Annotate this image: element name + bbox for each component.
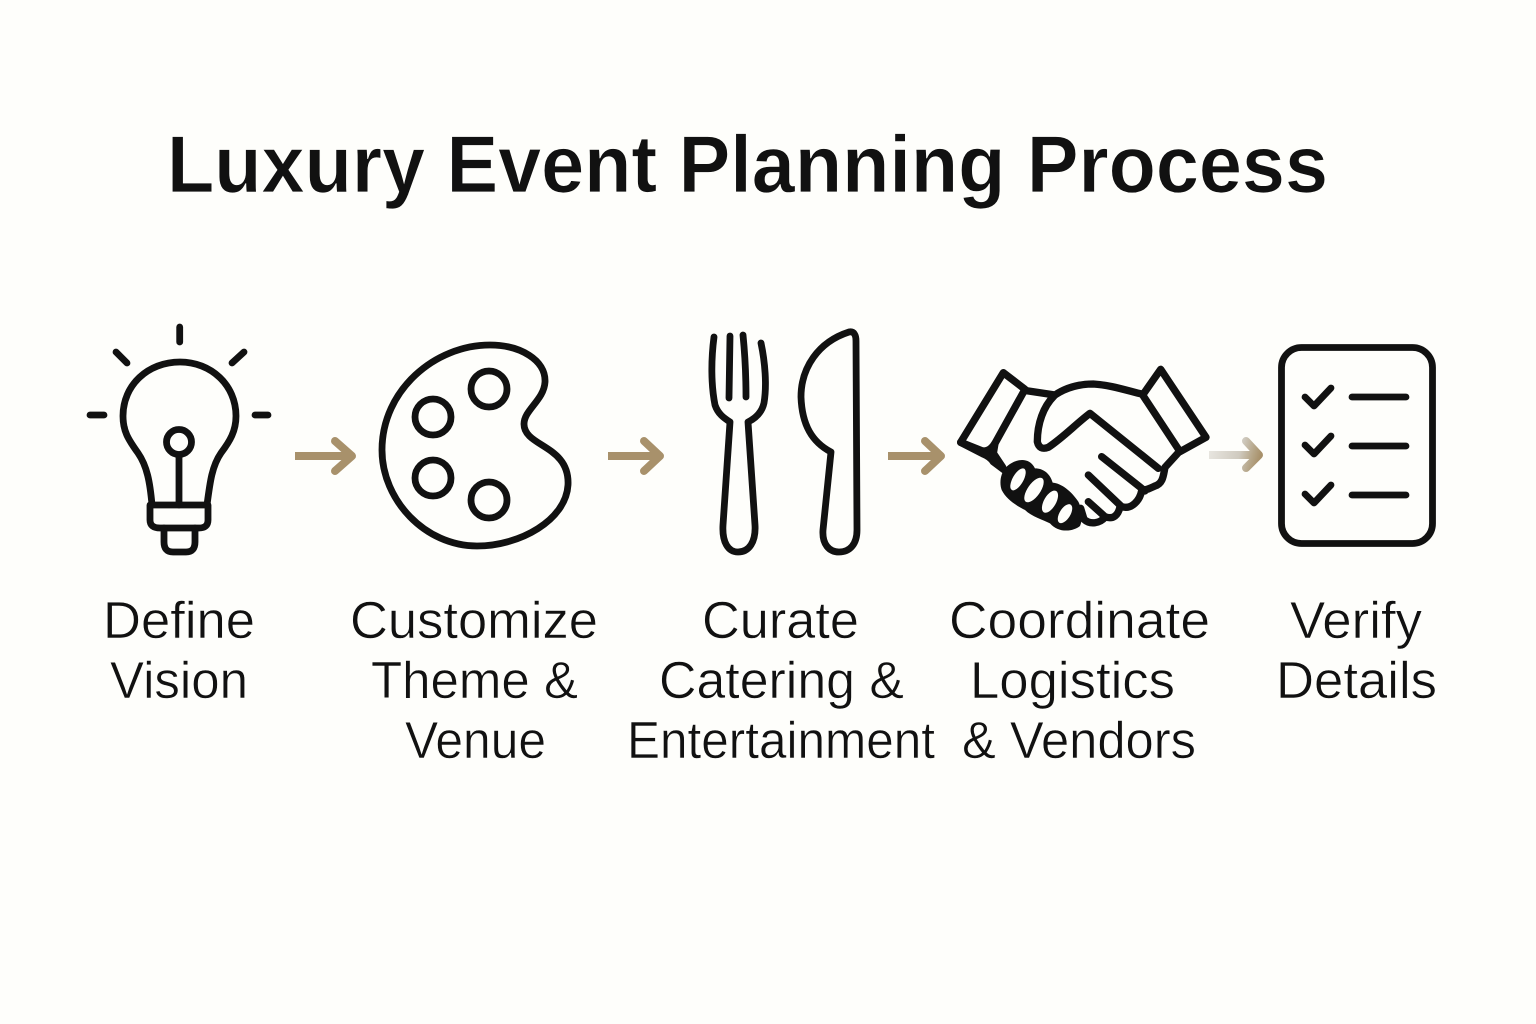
label: Coordinate Logistics & Vendors: Logistics [970,651,1175,709]
label: Define Vision: Define [103,591,255,649]
title: Luxury Event Planning Process [167,120,1328,210]
arrow: step 4 to step 5 (faded) [1209,441,1259,468]
label: Curate Catering & Entertainment: Catering & [659,651,904,709]
icon: paint palette [382,345,568,546]
icon: checklist [1282,348,1432,544]
label: Curate Catering & Entertainment: Entertainment [627,711,935,769]
label: Verify Details: Details [1276,651,1437,709]
arrow: step 1 to step 2 [295,441,352,471]
icon: light bulb [90,327,268,552]
arrow: step 3 to step 4 [888,441,941,471]
icon: fork and knife [712,332,857,552]
label: Verify Details [1276,591,1437,709]
label: Define Vision [103,591,255,709]
label: Customize Theme & Venue: Venue [405,711,546,769]
label: Coordinate Logistics & Vendors: Coordinate [949,591,1210,649]
label: Coordinate Logistics & Vendors: & Vendors [962,711,1196,769]
label: Curate Catering & Entertainment: Curate [702,591,859,649]
label: Define Vision: Vision [110,651,248,709]
label: Customize Theme & Venue: Customize [350,591,598,649]
label: Customize Theme & Venue [350,591,598,769]
label: Verify Details: Verify [1290,591,1422,649]
label: Customize Theme & Venue: Theme & [371,651,578,709]
label: Curate Catering & Entertainment [627,591,935,769]
icon: handshake [961,369,1206,531]
arrow: step 2 to step 3 [608,441,660,471]
label: Coordinate Logistics & Vendors [949,591,1210,769]
